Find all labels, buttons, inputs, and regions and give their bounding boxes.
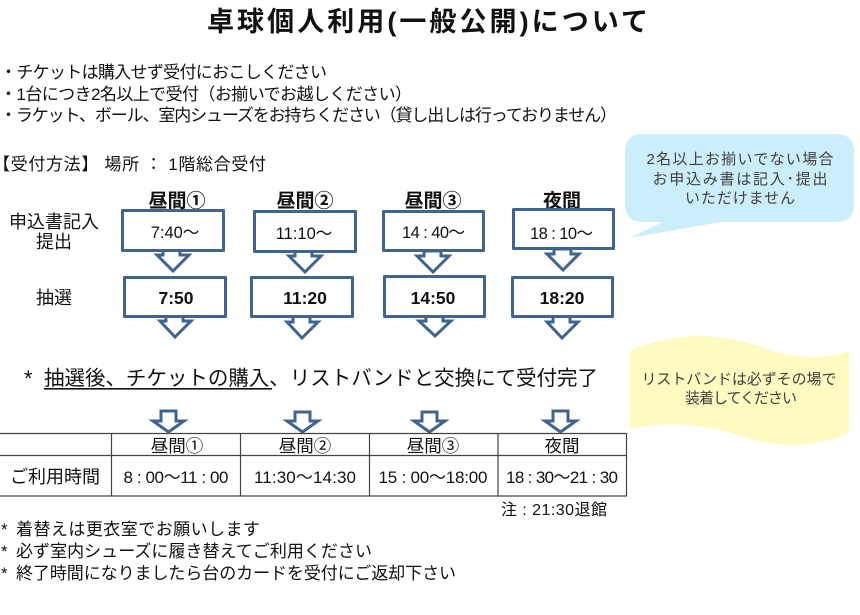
flow: lottery boxes with arrows: 18:20 xyxy=(540,288,585,308)
table: hours of use xyxy=(0,433,627,496)
flow: lottery boxes with arrows: 11:20 xyxy=(283,288,327,308)
table: hours of use: 昼間② xyxy=(279,436,331,456)
callout: yellow wave note: 装着してください xyxy=(685,390,797,407)
flow: application boxes with arrows: 18 : 10～ xyxy=(530,225,593,243)
flow: application boxes with arrows xyxy=(122,210,614,272)
table: hours of use: 夜間 xyxy=(544,436,580,456)
callout: yellow wave note: リストバンドは必ずその場で xyxy=(642,371,836,388)
text block: rules: ・1台につき2名以上で受付（お揃いでお越しください） xyxy=(0,85,412,104)
column headings: 昼間③ xyxy=(404,190,462,212)
table: hours of use: 昼間① xyxy=(151,436,203,456)
column headings: 昼間① xyxy=(148,190,206,212)
arrows to table xyxy=(153,411,576,432)
heading: reception method: 【受付方法】 場所 ： 1階総合受付 xyxy=(0,155,266,174)
statement: completion of reception: * xyxy=(24,366,33,391)
flow: application boxes with arrows: 7:40～ xyxy=(151,224,199,242)
text block: footnotes: * xyxy=(1,564,8,583)
text block: rules: ・チケットは購入せず受付におこしください xyxy=(0,63,327,82)
flow: application boxes with arrows: 14 : 40～ xyxy=(402,224,465,242)
column headings: 昼間② xyxy=(276,190,334,212)
text block: footnotes: 着替えは更衣室でお願いします xyxy=(16,520,260,539)
column headings: 夜間 xyxy=(543,190,581,212)
note: closing time: 注 : 21:30退館 xyxy=(501,501,607,519)
callout: blue speech bubble: お申込み書は記入･提出 xyxy=(652,171,828,188)
flow: lottery boxes with arrows: 7:50 xyxy=(158,288,194,308)
flow: application boxes with arrows: 11:10～ xyxy=(276,225,332,243)
flow: lottery boxes with arrows xyxy=(124,276,612,338)
text block: rules: ・ラケット、ボール、室内シューズをお持ちください（貸し出しは行っておりません） xyxy=(0,106,617,125)
table: hours of use: ご利用時間 xyxy=(10,467,100,487)
text block: footnotes: * xyxy=(1,520,8,539)
row label: application submission: 申込書記入 xyxy=(9,212,99,232)
column headings xyxy=(148,190,581,212)
flow: lottery boxes with arrows: 14:50 xyxy=(411,288,456,308)
row label: application submission xyxy=(9,212,99,252)
row label: lottery: 抽選 xyxy=(36,288,72,308)
callout: blue speech bubble xyxy=(625,134,854,238)
statement: completion of reception: 抽選後、チケットの購入、リストバンドと交換にて受付完了 xyxy=(44,367,598,390)
callout: yellow wave note xyxy=(630,336,849,445)
text block: footnotes: * xyxy=(1,542,8,561)
text block: footnotes xyxy=(1,520,456,583)
table: hours of use: 18 : 30～21 : 30 xyxy=(506,468,618,487)
table: hours of use: 15 : 00～18:00 xyxy=(378,468,488,487)
row label: application submission: 提出 xyxy=(36,232,72,252)
callout: blue speech bubble: いただけません xyxy=(685,190,795,207)
text block: rules xyxy=(0,63,617,125)
table: hours of use: 昼間③ xyxy=(407,436,459,456)
table: hours of use: 8 : 00～11 : 00 xyxy=(124,468,228,487)
text block: footnotes: 必ず室内シューズに履き替えてご利用ください xyxy=(16,542,372,561)
callout: blue speech bubble: 2名以上お揃いでない場合 xyxy=(646,151,834,168)
text block: footnotes: 終了時間になりましたら台のカードを受付にご返却下さい xyxy=(16,564,456,583)
table: hours of use: 11:30～14:30 xyxy=(254,468,356,487)
title: 卓球個人利用(一般公開)について xyxy=(207,7,648,37)
